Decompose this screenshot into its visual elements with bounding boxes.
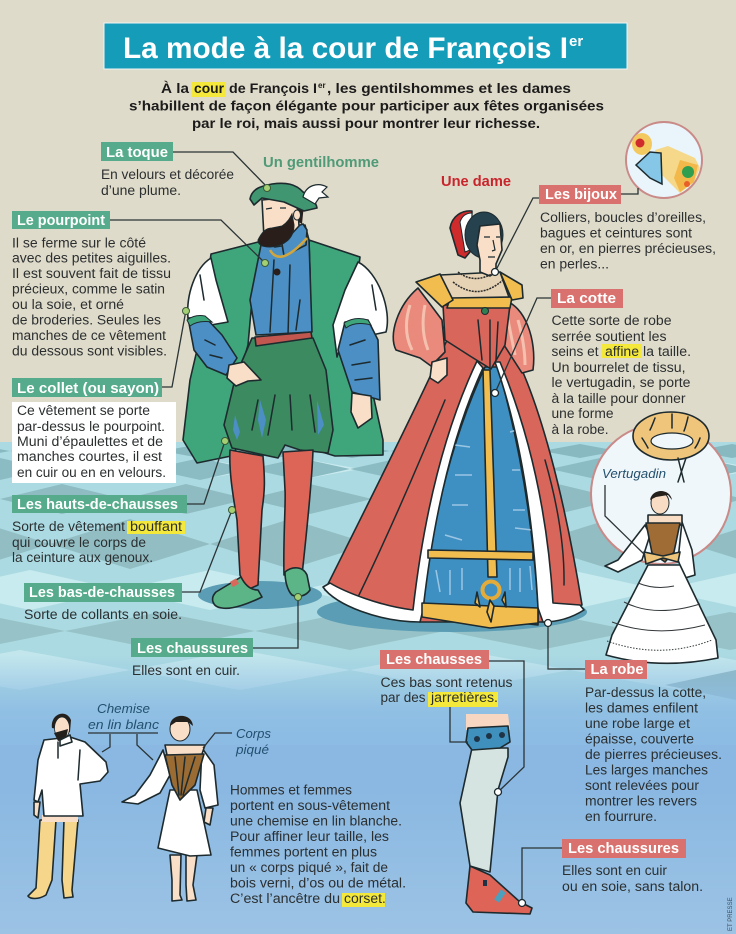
panel: le pourpoint [12,211,171,358]
intro text [129,80,604,131]
panel: le collet: manches courtes, il est [17,449,162,464]
panel: les bas-de-chausses: Les bas-de-chausses [29,585,175,601]
text block: sous-vêtements: Pour affiner leur taille, les [230,829,389,844]
panel: le pourpoint: Le pourpoint [17,213,105,229]
panel: le pourpoint: précieux, comme le satin [12,282,165,296]
panel: la robe: en fourrure. [585,809,657,824]
caption: en lin blanc: en lin blanc [88,717,160,732]
panel: la robe: sont relevées pour [585,778,700,793]
panel: les hauts-de-chausses: qui couvre le corps de [12,535,146,550]
captions: underwear [88,701,271,757]
caption: chemise: Chemise [97,701,150,716]
underwear: man [28,714,108,898]
panel: le collet [12,378,176,483]
caption: piqué: piqué [235,742,269,757]
panel: les chaussures (dame): Elles sont en cuir [562,863,668,878]
text block: sous-vêtements: Hommes et femmes [230,782,352,798]
neck, face, beard [280,224,307,256]
bodice [443,305,510,369]
panel: la toque: La toque [106,145,168,161]
panel: les chaussures (homme) [131,638,253,678]
panel: les bijoux: Colliers, boucles d’oreilles, [540,210,706,225]
panel: la robe: de pierres précieuses. [585,747,722,762]
panel: les bijoux: en or, en pierres précieuses, [540,241,716,256]
text block: sous-vêtements: un « corps piqué », fait de [230,860,388,875]
skirt [325,340,582,622]
panel: les hauts-de-chausses: bouffant [130,519,182,534]
inset: farthingale circle [591,412,731,663]
panel: la cotte: la taille. [643,344,691,359]
figure heading: une dame: Une dame [441,174,511,190]
illustration: gentleman [183,183,387,609]
text block: sous-vêtements: C’est l’ancêtre du [230,891,340,906]
text block: sous-vêtements: femmes portent en plus [230,844,377,860]
panel: les hauts-de-chausses: la ceinture aux genoux. [12,550,153,565]
panel: la cotte: à la taille pour donner [552,391,686,406]
panel: la cotte: à la robe. [552,422,608,437]
belt [255,332,312,346]
panel: le collet: Muni d’épaulettes et de [17,434,163,449]
background: checkered floor [0,442,736,934]
doublet [250,225,312,335]
panel: la toque: En velours et décorée [101,167,234,182]
caption: corps: Corps [236,726,271,741]
panel: la robe: les dames enfilent [585,700,698,716]
panel: la toque [101,142,234,198]
trunk hose [224,338,333,458]
panel: les bijoux: bagues et ceintures sont [540,226,692,240]
panel: la cotte: La cotte [557,291,616,307]
panel: le collet: Ce vêtement se porte [17,403,150,418]
text block: sous-vêtements [230,782,406,907]
panel: les chaussures (homme): Les chaussures [137,641,248,657]
panel: la robe: épaisse, couverte [585,732,694,746]
panel: le pourpoint: de broderies. Seules les [12,312,161,328]
panel: le pourpoint: Il est souvent fait de tissu [12,266,171,281]
panel: la robe [585,660,722,824]
panel: les hauts-de-chausses [12,495,187,565]
marker dots [182,184,552,906]
credit: ET PRESSE [728,897,734,931]
feather [303,185,328,204]
panel: les chausses: jarretières. [430,690,498,705]
text block: sous-vêtements: . [382,891,386,906]
sleeves [393,288,445,366]
panel: la cotte: Cette sorte de robe [552,313,672,328]
underwear: woman [122,716,218,901]
intro text: par le roi, mais aussi pour montrer leur richesse. [192,115,540,131]
panel: la robe: une robe large et [585,716,690,731]
text block: sous-vêtements: corset [344,891,382,906]
cape [183,241,262,463]
text block: sous-vêtements: une chemise en lin blanche. [230,814,402,828]
panel: la cotte: une forme [552,406,614,421]
text block: sous-vêtements: portent en sous-vêtement [230,798,390,813]
panel: la robe: Par-dessus la cotte, [585,685,706,700]
panel: la robe: montrer les revers [585,794,697,808]
intro text: de François I [229,80,317,96]
sleeves [188,317,237,375]
panel: la cotte: seins et [552,344,599,359]
fur trim [323,361,483,622]
panel: la cotte: serrée soutient les [552,329,667,344]
title banner [104,23,627,69]
panel: les chausses: par des [380,690,426,705]
shirt sleeves [188,258,228,326]
connectors [88,152,645,903]
panel: le pourpoint: ou la soie, et orné [12,297,124,312]
panel: les chaussures (homme): Elles sont en cuir. [132,663,240,678]
inset: jewels [626,122,702,198]
panel: les chausses: Ces bas sont retenus [380,675,513,690]
panel: les chausses [380,650,513,707]
panel: la robe: Les larges manches [585,762,708,778]
panel: le pourpoint: du dessous sont visibles. [12,344,167,358]
panel: le collet: par-dessus le pourpoint. [17,419,165,434]
hat [250,183,317,211]
panel: le pourpoint: Il se ferme sur le côté [12,236,146,250]
panel: la cotte: le vertugadin, se porte [552,375,690,390]
panel: les bijoux: Les bijoux [545,187,617,203]
panel: le pourpoint: avec des petites aiguilles. [12,250,171,266]
hands [227,362,261,386]
text block: sous-vêtements: bois verni, d’os ou de métal. [230,876,406,890]
background: beige wall [0,0,736,442]
panel: la robe: La robe [590,662,644,678]
gold bands and pendant [483,370,497,577]
panel: les chaussures (dame) [562,839,703,894]
panel: la toque: d’une plume. [101,183,181,198]
panel: le pourpoint: manches de ce vêtement [12,328,166,343]
panel: les bas-de-chausses [24,583,182,622]
figure heading: un gentilhomme: Un gentilhomme [263,154,379,171]
panel: les hauts-de-chausses: Sorte de vêtement [12,519,125,534]
stocking illustration [460,714,532,914]
panel: les bijoux [539,185,716,272]
panel: la cotte [551,289,691,437]
title banner: La mode à la cour de François I [123,32,568,65]
panel: les bas-de-chausses: Sorte de collants en soie. [24,607,182,622]
figure in farthingale [605,491,718,663]
panel: la cotte: affine [605,344,639,359]
panel: la cotte: Un bourrelet de tissu, [552,360,686,375]
panel: les chausses: Les chausses [386,652,482,668]
shoes [213,577,262,608]
intro text: cour [194,80,225,96]
title banner: er [569,33,583,50]
blue panel [422,367,538,625]
farthingale roll [633,412,709,482]
intro text: , les gentilshommes et les dames [327,80,571,96]
hand [430,358,447,383]
illustration: lady [317,211,587,632]
intro text: À la [161,80,189,96]
intro text: s’habillent de façon élégante pour participer aux fêtes organisées [129,98,604,114]
italic caption: Vertugadin [602,466,666,481]
legs [230,450,264,590]
panel: les chaussures (dame): ou en soie, sans talon. [562,879,703,894]
panel: le collet: en cuir ou en en velours. [17,465,166,480]
panel: les hauts-de-chausses: Les hauts-de-chausses [17,497,178,513]
panel: les bijoux: en perles... [540,256,609,272]
panel: le collet: Le collet (ou sayon) [17,381,159,397]
panel: les chaussures (dame): Les chaussures [568,841,679,857]
hood, hair, head [450,211,472,258]
partlet and collar [440,272,510,304]
intro text: er [318,81,326,90]
